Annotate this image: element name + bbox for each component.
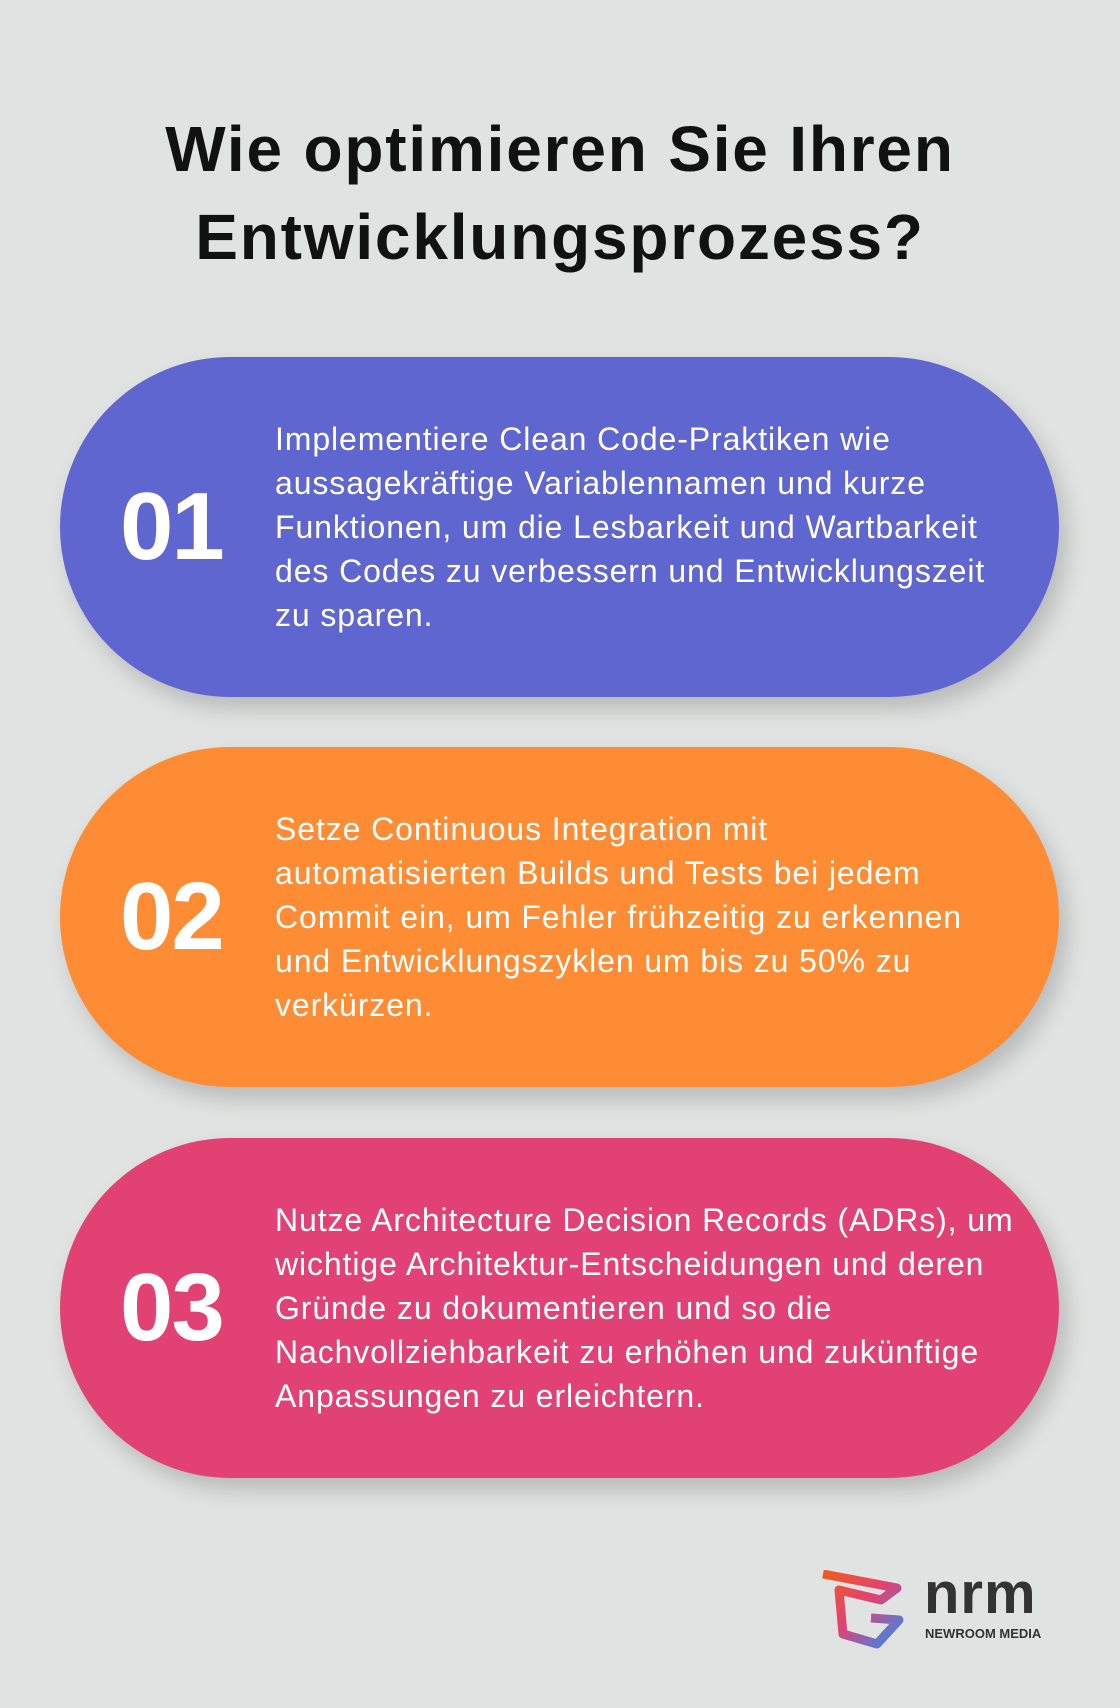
icon: logo mark [822, 1570, 904, 1648]
logo [822, 1561, 1041, 1648]
text 03: Nachvollziehbarkeit zu erhöhen und zukünftige [275, 1334, 979, 1370]
text 03 [275, 1202, 1014, 1414]
number 03: 03 [120, 1254, 223, 1361]
text 01: Funktionen, um die Lesbarkeit und Wartbarkeit [275, 509, 978, 545]
text 01: aussagekräftige Variablennamen und kurze [275, 465, 926, 501]
logo text: nrm [924, 1561, 1037, 1626]
text 03: Anpassungen zu erleichtern. [275, 1378, 705, 1414]
text 03: Nutze Architecture Decision Records (ADRs), um [275, 1202, 1014, 1238]
text 01 [275, 421, 985, 633]
text 01: Implementiere Clean Code-Praktiken wie [275, 421, 891, 457]
panel: step 01 [60, 357, 1059, 697]
number 02: 02 [120, 863, 223, 970]
title [165, 113, 955, 273]
panel: step 02 [60, 747, 1059, 1087]
title: Entwicklungsprozess? [195, 201, 925, 273]
title: Wie optimieren Sie Ihren [165, 113, 955, 185]
text 02: automatisierten Builds und Tests bei jedem [275, 855, 921, 891]
text 01: des Codes zu verbessern und Entwicklungszeit [275, 553, 985, 589]
text 03: Gründe zu dokumentieren und so die [275, 1290, 832, 1326]
text 02: und Entwicklungszyklen um bis zu 50% zu [275, 943, 911, 979]
number 01: 01 [120, 473, 223, 580]
text 02: Commit ein, um Fehler frühzeitig zu erkennen [275, 899, 962, 935]
text 02: verkürzen. [275, 987, 433, 1023]
text 02: Setze Continuous Integration mit [275, 811, 768, 847]
text 03: wichtige Architektur-Entscheidungen und deren [275, 1246, 984, 1282]
text 01: zu sparen. [275, 597, 433, 633]
logo: NEWROOM MEDIA [925, 1626, 1041, 1641]
panel: step 03 [60, 1138, 1059, 1478]
text 02 [275, 811, 962, 1023]
